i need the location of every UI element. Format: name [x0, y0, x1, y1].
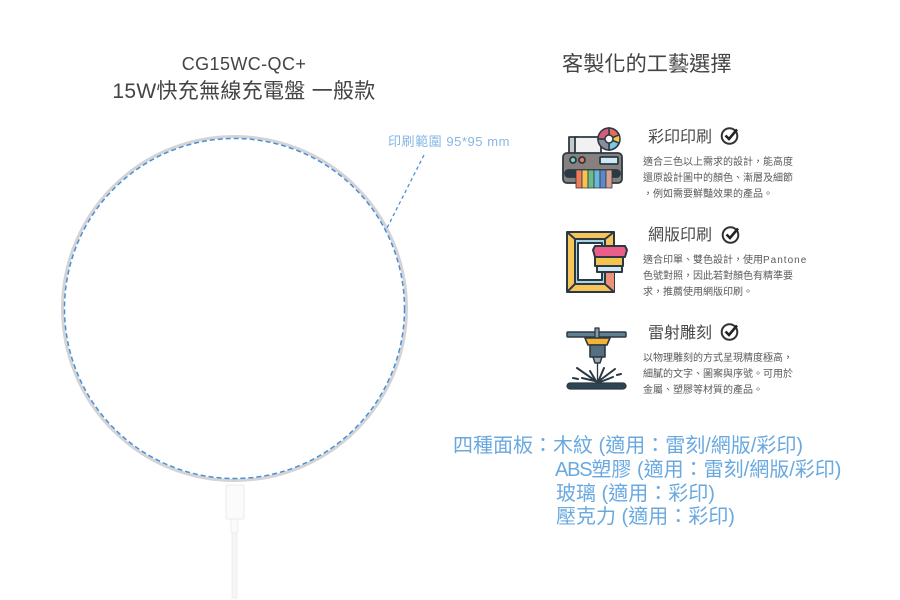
text: screen printing description: 求，推薦使用網版印刷。	[643, 287, 753, 298]
text: four panel types: 壓克力 (適用：彩印)	[556, 506, 735, 528]
leader line	[387, 155, 424, 228]
text: laser engraving description	[643, 352, 793, 396]
title: product name	[112, 54, 376, 103]
text: color printing description: 還原設計圖中的顏色、漸層及細節	[643, 173, 793, 184]
text: four panel types: 四種面板：木紋 (適用：雷刻/網版/彩印)	[453, 435, 803, 457]
icon: check mark	[720, 323, 738, 341]
text: laser engraving description: 金屬、塑膠等材質的產品。	[643, 385, 763, 396]
icon: check mark	[720, 127, 738, 145]
title: product name: 15W快充無線充電盤 一般款	[112, 80, 376, 103]
text: color printing description: 適合三色以上需求的設計，能高度	[643, 157, 793, 168]
icon: screen printing frame	[566, 231, 628, 293]
icon: check mark	[722, 226, 740, 244]
heading: laser engraving: 雷射雕刻	[648, 325, 712, 342]
text: laser engraving description: 細膩的文字、圖案與序號。可用於	[643, 369, 793, 380]
text: screen printing description: 適合印單、雙色設計，使用Pantone	[643, 255, 807, 266]
charger disc	[62, 136, 406, 480]
heading: customization: 客製化的工藝選擇	[562, 53, 732, 76]
text: screen printing description	[643, 254, 807, 298]
text: four panel types: ABS塑膠 (適用：雷刻/網版/彩印)	[555, 459, 841, 481]
print area dashed circle	[64, 138, 404, 478]
text: laser engraving description: 以物理雕刻的方式呈現精度極高，	[643, 353, 793, 364]
icon: laser engraver	[566, 327, 627, 390]
heading: screen printing: 網版印刷	[648, 227, 712, 244]
cable	[231, 519, 238, 598]
icon: color printer	[562, 127, 623, 188]
text: color printing description: ，例如需要鮮豔效果的產品。	[643, 189, 773, 200]
text: screen printing description: 色號對照，因此若對顏色有精準要	[643, 271, 793, 282]
text: four panel types	[453, 435, 841, 528]
heading: color printing: 彩印印刷	[648, 129, 712, 146]
label: print area: 印刷範圍 95*95 mm	[388, 134, 510, 149]
text: four panel types: 玻璃 (適用：彩印)	[556, 483, 715, 505]
title: product name: CG15WC-QC+	[182, 54, 306, 74]
connector	[226, 485, 244, 519]
text: color printing description	[643, 156, 793, 200]
